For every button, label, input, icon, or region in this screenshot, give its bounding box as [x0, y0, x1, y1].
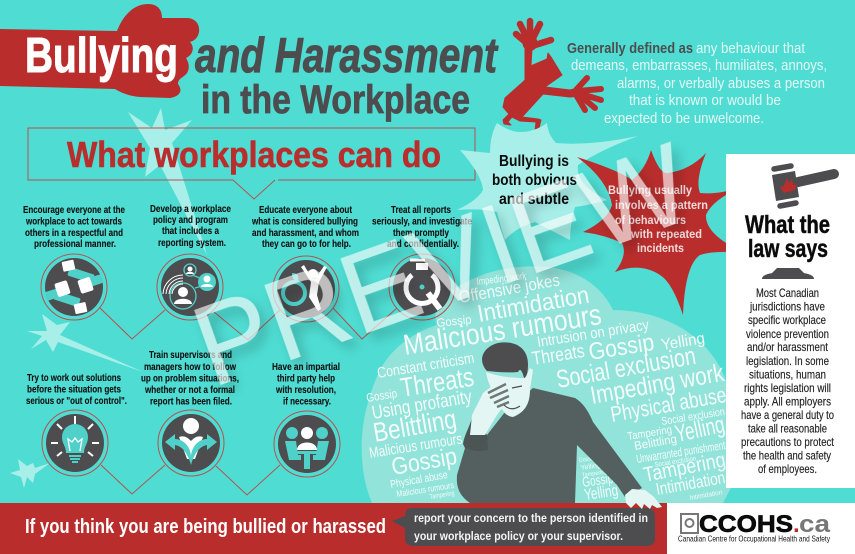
step text: impartial third party: Have an impartial — [272, 361, 340, 373]
icon: gavel sound block — [762, 268, 814, 279]
cloud of bullying words: Malicious rumours — [396, 480, 455, 499]
heading box: what workplaces can do: What workplaces can do — [67, 134, 441, 175]
step text: work out solutions: Try to work out solutions — [27, 372, 121, 384]
icon: light bulb — [42, 410, 108, 476]
cloud of bullying words: Gossip — [581, 470, 614, 490]
cloud of bullying words: Intimidation — [654, 468, 727, 499]
bottom banner: If you think you are being bullied or harassed — [25, 516, 386, 538]
step text: train supervisors: whether or not a formal — [144, 384, 235, 396]
step text: treat all reports: and confidentially. — [387, 238, 459, 250]
cloud of bullying words: Yelling — [673, 411, 727, 448]
step text: encourage everyone — [23, 204, 125, 250]
cloud of bullying words: Gossip — [365, 386, 398, 405]
cloud of bullying words: Threats — [530, 341, 586, 370]
cloud of bullying words: Gossip — [436, 312, 472, 330]
logo: CCOHS: ca — [799, 511, 831, 538]
step text: train supervisors: up on problem situations, — [141, 372, 239, 384]
red starburst: pattern of behaviours: Bullying usually — [608, 183, 692, 197]
step text: treat all reports — [372, 204, 472, 250]
PREVIEW watermark: PREVIEW — [178, 119, 706, 412]
step text: educate everyone: Educate everyone about — [259, 204, 352, 216]
red starburst: pattern of behaviours: involves a pattern — [615, 198, 708, 212]
step text: treat all reports: Treat all reports — [391, 204, 451, 216]
step text: train supervisors: managers how to follow — [144, 361, 237, 373]
law text: Most Canadian — [756, 286, 819, 300]
step text: educate everyone — [251, 204, 359, 250]
red starburst: pattern of behaviours — [577, 150, 745, 315]
step text: educate everyone: what is considered bullying — [251, 216, 358, 228]
law text: rights legislation will — [744, 381, 831, 395]
icon: person with branching arrows — [158, 410, 224, 476]
step text: impartial third party — [272, 361, 340, 408]
logo: CCOHS — [667, 503, 855, 554]
definition text: any behaviour that — [696, 40, 806, 57]
logo: CCOHS: . — [793, 511, 800, 538]
step text: train supervisors: Train supervisors and — [149, 349, 232, 361]
icon: stopwatch — [389, 254, 455, 320]
law text: of employees. — [758, 462, 817, 476]
cloud of bullying words: Yelling — [660, 330, 706, 354]
cloud of bullying words — [362, 266, 735, 504]
man's hand resting on banner — [625, 489, 662, 509]
red starburst: pattern of behaviours: with repeated — [630, 227, 702, 241]
law text: precautions to protect — [741, 435, 835, 449]
cloud of bullying words: Physical abuse — [389, 469, 449, 491]
title: Bullying — [25, 29, 178, 83]
law text: situations, human — [749, 368, 826, 382]
step text: encourage everyone: others in a respectful and — [25, 227, 123, 239]
step text: encourage everyone: Encourage everyone at the — [23, 204, 125, 216]
step text: work out solutions: before the situation gets — [27, 384, 121, 396]
cloud of bullying words: Malicious rumours — [401, 299, 604, 362]
icon: apple and cheering person — [273, 256, 339, 322]
heading box: what workplaces can do — [28, 128, 475, 199]
step text: develop policy: reporting system. — [158, 237, 226, 249]
red starburst: pattern of behaviours: of behaviours — [615, 213, 686, 227]
law text: the health and safety — [743, 448, 831, 462]
bottom banner — [0, 503, 667, 554]
cloud of bullying words: Impeding work — [476, 271, 528, 288]
definition text: expected to be unwelcome. — [604, 110, 764, 127]
cloud of bullying words: Offensive jokes — [457, 271, 561, 307]
step text: train supervisors — [141, 349, 239, 408]
step text: impartial third party: with resolution, — [275, 384, 336, 396]
cloud of bullying words: Physical abuse — [609, 382, 728, 427]
cloud of bullying words: Tampering — [627, 424, 673, 443]
pale starburst: bullying is obvious and subtle: and subtle — [499, 191, 569, 208]
speech bubble: report your concern: report your concern to the person identified in — [414, 511, 648, 525]
panel: what the law says: What the — [745, 211, 830, 239]
step text: impartial third party: if necessary. — [283, 396, 331, 408]
step text: educate everyone: and harassment, and whom — [252, 227, 359, 239]
step text: work out solutions — [26, 372, 127, 407]
law text — [741, 286, 835, 476]
step text: develop policy: Develop a workplace — [150, 203, 231, 215]
step text: develop policy: that includes a — [162, 225, 219, 237]
pale starburst: bullying is obvious and subtle — [457, 123, 638, 240]
step text: impartial third party: third party help — [277, 372, 335, 384]
icon: reporting network — [157, 254, 223, 320]
cloud of bullying words: Social exclusion — [554, 342, 698, 394]
cloud of bullying words: Intrusion on privacy — [536, 316, 651, 351]
cloud of bullying words: Gossip — [389, 443, 459, 481]
cloud of bullying words: Yelling — [583, 482, 619, 504]
cloud of bullying words: Unwarranted punishment — [635, 438, 727, 466]
step text: develop policy — [150, 203, 231, 249]
pale starburst: bullying is obvious and subtle: Bullying is — [499, 153, 569, 170]
title: in the Workplace — [201, 78, 470, 122]
cloud of bullying words: Belittling — [371, 404, 459, 448]
cloud of bullying words: Social exclusion — [661, 406, 726, 428]
cloud of bullying words: Constant criticism — [376, 350, 475, 382]
law text: take all reasonable — [748, 422, 827, 436]
cloud of bullying words: Gossip — [578, 456, 596, 464]
definition text: Generally defined as — [567, 40, 693, 57]
cloud of bullying words: Using profanity — [370, 386, 474, 424]
cloud of bullying words: Impeding work — [588, 359, 726, 410]
speech bubble: report your concern — [392, 508, 655, 546]
step text: educate everyone: they can go to for help. — [262, 238, 351, 250]
step text: encourage everyone: professional manner. — [34, 238, 116, 250]
law text: apply. All employers — [744, 394, 831, 408]
cloud of bullying words: Intimidation — [689, 489, 723, 502]
title — [25, 29, 498, 122]
icon: three people at a table — [274, 411, 340, 477]
step text: work out solutions: serious or "out of control". — [26, 395, 127, 407]
law text: violence prevention — [746, 327, 829, 341]
step text: develop policy: policy and program — [153, 214, 228, 226]
decorative star: top with long tail — [128, 108, 207, 255]
definition text: alarms, or verbally abuses a person — [617, 75, 825, 92]
step text: train supervisors: report has been filed. — [150, 396, 232, 408]
cloud of bullying words: Intimidation — [475, 282, 591, 328]
cloud of bullying words: Yelling — [580, 462, 601, 472]
law text: legislation. In some — [746, 354, 829, 368]
red starburst: pattern of behaviours: incidents — [637, 241, 684, 255]
stressed man illustration — [457, 342, 642, 503]
cloud of bullying words: Threats — [398, 362, 476, 403]
law text: specific workplace — [748, 313, 826, 327]
pale starburst: bullying is obvious and subtle: both obvious — [492, 172, 577, 189]
title: and Harassment — [195, 29, 498, 83]
cloud of bullying words: Tampering — [429, 490, 455, 501]
step text: encourage everyone: workplace to act towards — [25, 216, 122, 228]
cloud of bullying words: Gossip — [587, 329, 656, 366]
step text: treat all reports: seriously, and investigate — [372, 216, 472, 228]
icon: flailing red figure — [503, 21, 601, 132]
icon: four linked hands — [41, 254, 107, 320]
panel: what the law says — [726, 154, 855, 488]
decorative star: left middle — [27, 314, 143, 372]
definition text: that is known or would be — [629, 92, 781, 109]
cloud of bullying words: Tampering — [581, 469, 608, 479]
decorative star: bottom left — [10, 459, 50, 488]
cloud of bullying words: Belittling — [633, 432, 678, 453]
panel: what the law says: law says — [748, 235, 828, 263]
fist banner — [0, 4, 199, 98]
cloud of bullying words: Malicious rumours — [368, 430, 463, 462]
law text: and/or harassment — [747, 340, 829, 354]
law text: jurisdictions have — [749, 300, 825, 314]
step text: treat all reports: them promptly — [393, 227, 449, 239]
cloud of bullying words: Tampering — [642, 448, 727, 487]
zigzag connectors — [100, 308, 397, 495]
icon: gavel — [772, 166, 834, 206]
cloud of bullying words: Social exclusion — [654, 455, 697, 469]
definition text — [567, 40, 827, 127]
speech bubble: report your concern: your workplace policy or your supervisor. — [414, 529, 623, 543]
logo: CCOHS: CCOHS — [699, 511, 793, 538]
